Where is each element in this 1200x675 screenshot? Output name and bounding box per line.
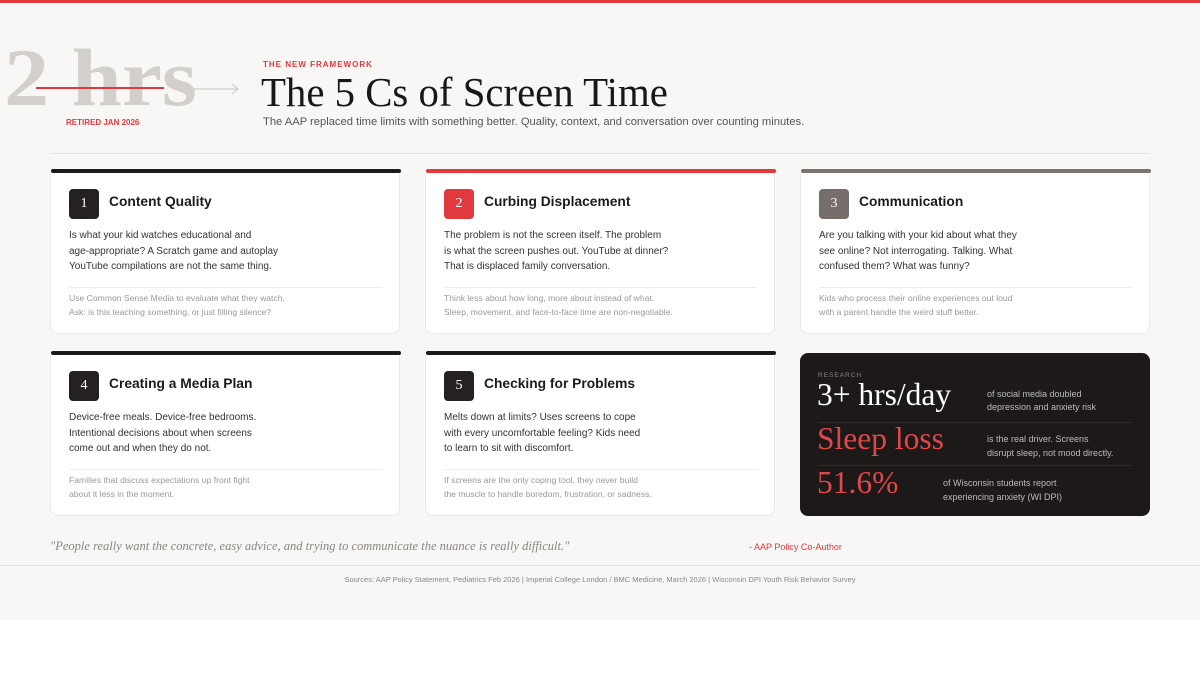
eyebrow: THE NEW FRAMEWORK (263, 60, 373, 69)
card 2: is what the screen pushes out. YouTube at dinner? (444, 246, 668, 256)
card 4 (50, 355, 400, 516)
card 5: 5 (456, 378, 462, 393)
card 5 (425, 355, 775, 516)
arrow (194, 84, 239, 94)
card 3: confused them? What was funny? (819, 261, 970, 272)
research panel: is the real driver. Screens (987, 434, 1089, 444)
retired label: RETIRED JAN 2026 (66, 118, 139, 127)
card 5: with every uncomfortable feeling? Kids need (444, 428, 640, 438)
research panel: of Wisconsin students report (943, 478, 1057, 488)
card 4: Device-free meals. Device-free bedrooms. (69, 412, 256, 423)
card 5: the muscle to handle boredom, frustration, or sadness. (444, 489, 652, 499)
card 2: Sleep, movement, and face-to-face time are non-negotiable. (444, 307, 673, 317)
card 3 (800, 173, 1150, 334)
research panel: experiencing anxiety (WI DPI) (943, 492, 1062, 502)
card 2: That is displaced family conversation. (444, 261, 610, 272)
card 5: Checking for Problems (484, 376, 635, 391)
card 1: Content Quality (109, 194, 212, 209)
card 4: Families that discuss expectations up front fight (69, 475, 250, 485)
card 2: Think less about how long, more about instead of what. (444, 293, 654, 303)
card 2: The problem is not the screen itself. The problem (444, 230, 661, 241)
card 5: Melts down at limits? Uses screens to cope (444, 412, 636, 423)
card 4: about it less in the moment. (69, 489, 174, 499)
subtitle: The AAP replaced time limits with something better. Quality, context, and conversation over counting minutes. (263, 116, 804, 128)
card 3: 3 (830, 196, 838, 211)
research panel: disrupt sleep, not mood directly. (987, 448, 1113, 458)
card 1: 1 (80, 196, 88, 211)
research panel: of social media doubled (987, 389, 1082, 399)
card 4: Creating a Media Plan (109, 376, 252, 391)
card 3: Are you talking with your kid about what they (819, 230, 1017, 241)
card 2 (425, 173, 775, 334)
card 4: Intentional decisions about when screens (69, 428, 252, 438)
title: The 5 Cs of Screen Time (261, 70, 668, 115)
card 3: Kids who process their online experiences out loud (819, 293, 1012, 303)
card 1: age-appropriate? A Scratch game and autoplay (69, 246, 278, 256)
research panel: depression and anxiety risk (987, 402, 1096, 412)
quote: "People really want the concrete, easy advice, and trying to communicate the nuance is really difficult." (50, 539, 569, 553)
card 1: Is what your kid watches educational and (69, 230, 251, 241)
research panel: 3+ hrs/day (817, 377, 951, 412)
card 1 (50, 173, 400, 334)
card 3: with a parent handle the weird stuff better. (819, 307, 978, 317)
card 5: to learn to sit with discomfort. (444, 443, 574, 454)
card 4: 4 (80, 378, 88, 393)
card 3: see online? Not interrogating. Talking. What (819, 246, 1012, 256)
card 1: YouTube compilations are not the same thing. (69, 261, 272, 272)
card 2: 2 (456, 196, 462, 211)
sources: Sources: AAP Policy Statement, Pediatrics Feb 2026 | Imperial College London / BMC Medicine, March 2026 | Wisconsin DPI Youth Risk Behavior Survey (344, 575, 856, 584)
ghost "2 hrs": 2 hrs (4, 32, 197, 123)
card 4: come out and when they do not. (69, 443, 211, 454)
card 2: Curbing Displacement (484, 194, 630, 209)
card 1: Ask: is this teaching something, or just filling silence? (69, 307, 271, 317)
strike line (36, 87, 164, 89)
quote author: - AAP Policy Co-Author (749, 542, 842, 552)
card 3: Communication (859, 194, 963, 209)
research panel (800, 353, 1150, 516)
research panel: RESEARCH (818, 372, 862, 379)
card 5: If screens are the only coping tool, they never build (444, 475, 638, 485)
research panel: Sleep loss (817, 421, 944, 456)
card 1: Use Common Sense Media to evaluate what they watch. (69, 293, 285, 303)
research panel: 51.6% (817, 465, 898, 500)
